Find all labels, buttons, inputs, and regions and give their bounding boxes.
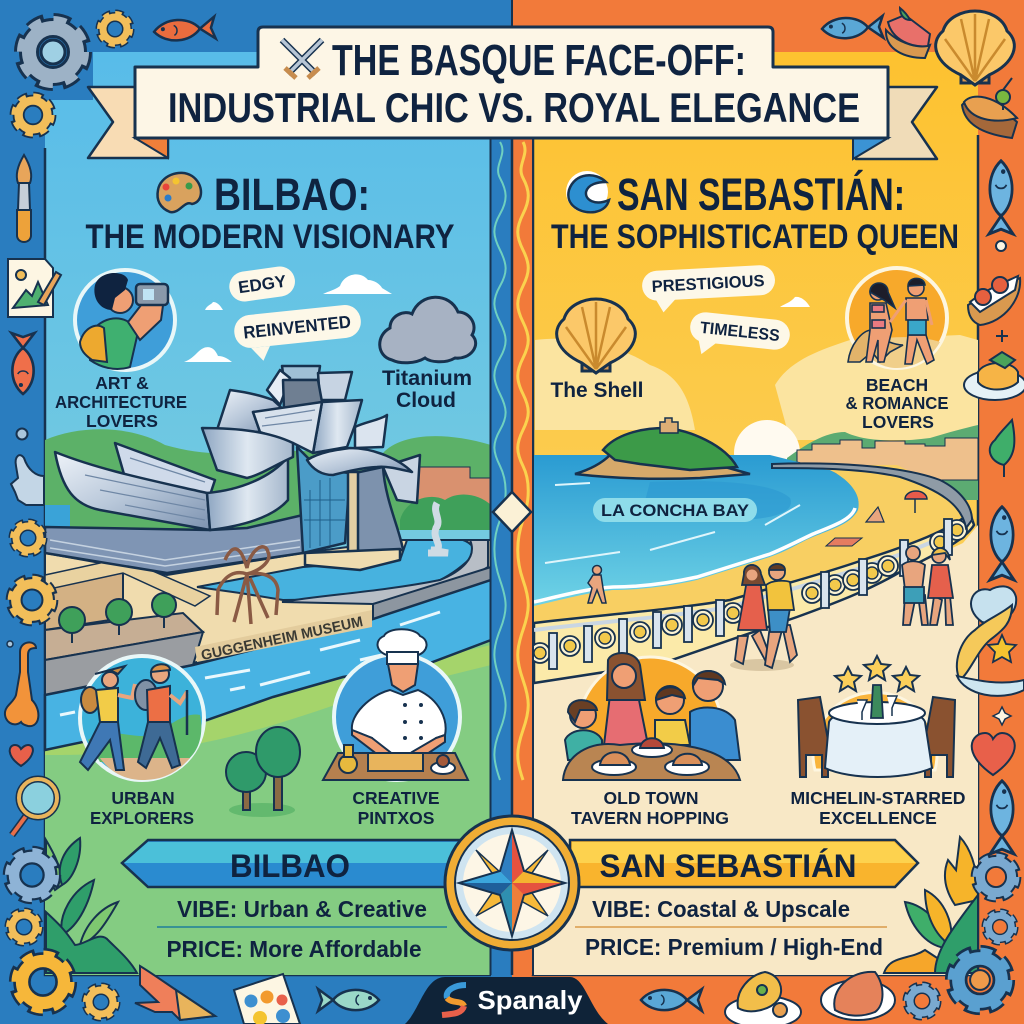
base bbox=[45, 515, 303, 573]
dark tower bbox=[283, 380, 322, 410]
town skyline bbox=[797, 438, 978, 480]
label: PINTXOS bbox=[358, 808, 434, 828]
right block bbox=[383, 455, 420, 503]
gear top bbox=[100, 14, 130, 44]
heading line 1: SAN SEBASTIÁN: bbox=[617, 169, 905, 220]
towel bbox=[826, 538, 862, 546]
couple far right bbox=[902, 546, 953, 625]
gears left bbox=[13, 523, 43, 553]
feature: creative pintxos bbox=[323, 629, 468, 828]
sea highlights bbox=[545, 483, 800, 563]
tower top bbox=[282, 366, 320, 380]
label bbox=[90, 788, 194, 828]
bay highlight bbox=[640, 481, 791, 520]
trees behind museum bbox=[400, 495, 491, 530]
right border background bbox=[512, 0, 1024, 1024]
atrium bbox=[297, 447, 350, 553]
speech bubble: Reinvented bbox=[233, 303, 364, 363]
gear bbox=[9, 912, 39, 942]
pale clouds bbox=[535, 335, 978, 440]
heading line 1: BILBAO: bbox=[214, 169, 370, 220]
small cloud bbox=[780, 297, 810, 307]
price: PRICE: More Affordable bbox=[166, 936, 422, 962]
banner bbox=[122, 840, 460, 887]
icon: family at table bbox=[563, 653, 740, 780]
couple walking on promenade bbox=[730, 564, 797, 671]
icon: crossed swords bbox=[282, 40, 322, 78]
label: ARCHITECTURE bbox=[55, 392, 187, 412]
price: PRICE: Premium / High-End bbox=[585, 934, 883, 960]
logo: Spanaly bbox=[405, 977, 608, 1024]
left border background bbox=[0, 0, 512, 1024]
heading: Bilbao bbox=[86, 169, 455, 256]
divider bbox=[575, 926, 887, 928]
right ribbon tail bbox=[856, 87, 937, 159]
left ribbon tail bbox=[88, 87, 168, 158]
lawn light strip bbox=[45, 645, 491, 755]
dot bbox=[7, 641, 13, 647]
icon: fine dining table bbox=[798, 656, 955, 777]
speech bubble: Edgy bbox=[227, 265, 297, 303]
promenade railing bbox=[530, 513, 974, 683]
left wing bbox=[55, 452, 210, 530]
comparison: San Sebastian bbox=[570, 840, 918, 960]
dot bbox=[996, 241, 1006, 251]
left fold bbox=[135, 138, 168, 158]
gear bbox=[986, 913, 1014, 941]
logo text: Spanaly bbox=[478, 985, 583, 1015]
icon: hikers bbox=[80, 656, 204, 780]
fish bbox=[990, 507, 1014, 580]
label: & ROMANCE bbox=[846, 393, 948, 413]
label: ART & bbox=[95, 373, 149, 393]
gear left bbox=[15, 97, 51, 133]
icon: photographer bbox=[75, 270, 175, 370]
label: BEACH bbox=[866, 375, 928, 395]
speech bubble: Timeless: TIMELESS bbox=[699, 319, 781, 345]
front band bbox=[207, 457, 288, 530]
dessert plate bbox=[964, 352, 1024, 400]
steak plate bbox=[821, 972, 895, 1020]
sun bbox=[734, 420, 800, 486]
plaza sand bbox=[45, 540, 491, 672]
reflecting pool bbox=[197, 540, 474, 600]
title banner bbox=[88, 27, 937, 159]
food plate bbox=[725, 972, 801, 1024]
title line 1: THE BASQUE FACE-OFF: bbox=[332, 36, 746, 85]
speech bubble: Timeless bbox=[687, 311, 791, 363]
river highlights bbox=[60, 612, 440, 715]
walkway rim bbox=[282, 540, 488, 604]
icon: titanium cloud bbox=[380, 297, 476, 363]
foliage: bottom left bbox=[46, 838, 137, 973]
heading: San Sebastian bbox=[551, 169, 959, 256]
pillar bbox=[348, 472, 358, 552]
dot bbox=[16, 428, 28, 440]
right fold bbox=[853, 138, 888, 159]
speech bubble: Prestigious bbox=[641, 265, 776, 313]
label bbox=[352, 788, 440, 828]
fish bbox=[641, 989, 702, 1011]
label: LOVERS bbox=[862, 412, 934, 432]
swirl bbox=[957, 586, 1024, 696]
border icons: left bbox=[5, 14, 130, 1017]
fountain bbox=[428, 503, 448, 553]
terrace block bbox=[45, 573, 123, 630]
promenade ground bbox=[534, 525, 978, 975]
large gear bbox=[953, 953, 1007, 1007]
walker bbox=[588, 566, 606, 603]
border icons: top bbox=[153, 8, 1014, 85]
fish bbox=[989, 161, 1013, 234]
persona: art lovers bbox=[55, 270, 187, 431]
river wall bbox=[373, 567, 491, 620]
heading line 2: THE MODERN VISIONARY bbox=[86, 218, 455, 256]
fish bbox=[990, 781, 1014, 854]
persona: beach lovers bbox=[846, 268, 948, 432]
centre diamond bbox=[493, 492, 531, 532]
label: EXCELLENCE bbox=[819, 808, 937, 828]
beach bbox=[534, 465, 972, 628]
label: OLD TOWN bbox=[604, 788, 698, 808]
grey embankment bbox=[45, 632, 203, 695]
label bbox=[846, 375, 948, 432]
label: URBAN bbox=[111, 788, 175, 808]
label: TAVERN HOPPING bbox=[571, 808, 729, 828]
right structure bbox=[355, 467, 403, 552]
panel lines bbox=[85, 410, 315, 520]
title line 2: INDUSTRIAL CHIC VS. ROYAL ELEGANCE bbox=[168, 84, 860, 131]
border icons: right bbox=[907, 78, 1024, 1016]
town behind museum bbox=[417, 467, 491, 510]
speech bubble: Reinvented: REINVENTED bbox=[242, 311, 352, 343]
fish bbox=[153, 17, 216, 43]
label: MICHELIN-STARRED bbox=[790, 788, 966, 808]
leaf bbox=[990, 420, 1014, 477]
gear bbox=[17, 956, 69, 1008]
label: Titanium Cloud: Cloud bbox=[396, 389, 456, 412]
fish bbox=[318, 989, 379, 1011]
lawn bbox=[45, 640, 491, 975]
left water wing 2 bbox=[115, 443, 215, 495]
label: La Concha Bay bbox=[593, 498, 757, 522]
comparison: Bilbao bbox=[122, 840, 460, 962]
swatch card bbox=[234, 974, 300, 1024]
ramp bbox=[45, 558, 210, 606]
icon: chef bbox=[323, 629, 468, 780]
banner text: SAN SEBASTIÁN bbox=[600, 848, 856, 884]
vibe: VIBE: Coastal & Upscale bbox=[592, 896, 850, 922]
border icons: bottom bbox=[135, 966, 895, 1024]
maman spider sculpture bbox=[217, 547, 278, 624]
gear bbox=[976, 858, 1016, 896]
icon: beach couple bbox=[847, 268, 947, 368]
feature: old town tavern hopping bbox=[563, 653, 740, 828]
beach umbrella bbox=[905, 491, 927, 513]
sea wall bbox=[772, 463, 972, 528]
icon: compass bbox=[445, 816, 579, 950]
label: Titanium Cloud: Titanium bbox=[382, 367, 472, 390]
left upper block bbox=[217, 390, 284, 432]
gears bottom left bbox=[10, 852, 54, 898]
label: La Concha Bay: LA CONCHA BAY bbox=[601, 501, 750, 520]
large gear bbox=[23, 22, 83, 82]
foam bbox=[534, 508, 855, 602]
tapas bbox=[886, 8, 930, 58]
fish left bbox=[11, 333, 35, 394]
green hills bbox=[45, 429, 491, 530]
vibe: VIBE: Urban & Creative bbox=[177, 896, 427, 922]
speech bubble: Edgy: EDGY bbox=[237, 272, 288, 297]
persona: urban explorers bbox=[80, 656, 204, 828]
magnifier bbox=[12, 779, 57, 835]
banner bbox=[570, 840, 918, 887]
island bbox=[575, 418, 750, 479]
heart bbox=[972, 733, 1015, 775]
centre line top bbox=[511, 0, 513, 60]
icon: shell bbox=[557, 299, 635, 373]
sparkle bbox=[993, 707, 1011, 725]
tapa with olive bbox=[962, 78, 1017, 138]
label bbox=[571, 788, 729, 828]
icon: wave bbox=[566, 171, 609, 213]
clouds in sky bbox=[184, 274, 392, 362]
sunbather bbox=[866, 507, 884, 522]
star bbox=[988, 635, 1016, 662]
right rear bbox=[313, 400, 362, 453]
centre panel bbox=[253, 402, 322, 453]
left water behind museum bbox=[45, 505, 70, 528]
divider bbox=[157, 926, 447, 928]
canopy bbox=[307, 448, 412, 475]
hills bbox=[787, 425, 978, 500]
trees on plaza bbox=[59, 593, 176, 643]
thumb hand bbox=[11, 455, 44, 505]
heart bbox=[10, 745, 33, 766]
tapa bbox=[968, 276, 1020, 325]
sail bbox=[202, 428, 293, 478]
logo mark bbox=[442, 985, 466, 1015]
plus bbox=[996, 330, 1008, 342]
plaque: Guggenheim Museum: GUGGENHEIM MUSEUM bbox=[200, 614, 365, 664]
label bbox=[790, 788, 966, 828]
sea bbox=[534, 455, 859, 606]
label: the shell: The Shell bbox=[550, 379, 644, 402]
label: EXPLORERS bbox=[90, 808, 194, 828]
paintbrush bbox=[17, 155, 31, 242]
tree terrace bbox=[45, 613, 203, 660]
museum bbox=[45, 366, 420, 573]
sketch page bbox=[8, 259, 61, 317]
icon: palette bbox=[158, 173, 201, 212]
shell tool bbox=[135, 966, 215, 1020]
heading line 2: THE SOPHISTICATED QUEEN bbox=[551, 218, 959, 256]
feature: Michelin dining bbox=[790, 656, 966, 828]
centre divider bbox=[490, 135, 533, 975]
main plate bbox=[135, 27, 888, 138]
gear bbox=[86, 987, 116, 1017]
lawn trees bbox=[226, 727, 300, 810]
banner text: BILBAO bbox=[230, 848, 350, 884]
speech bubble: Prestigious: PRESTIGIOUS bbox=[651, 272, 765, 296]
label: LOVERS bbox=[86, 411, 158, 431]
foliage: bottom right bbox=[884, 837, 978, 973]
platform bbox=[305, 549, 400, 570]
fish bbox=[822, 16, 883, 40]
paint tool bbox=[5, 642, 38, 726]
label bbox=[55, 373, 187, 431]
fins bbox=[267, 370, 290, 405]
label: Titanium Cloud bbox=[382, 367, 472, 412]
label: CREATIVE bbox=[352, 788, 440, 808]
river bbox=[45, 580, 491, 750]
panel: San Sebastian bbox=[530, 52, 978, 975]
tree shadow bbox=[229, 803, 295, 817]
gear bbox=[907, 986, 937, 1016]
panel: Bilbao bbox=[45, 52, 491, 975]
shell bbox=[936, 11, 1014, 85]
